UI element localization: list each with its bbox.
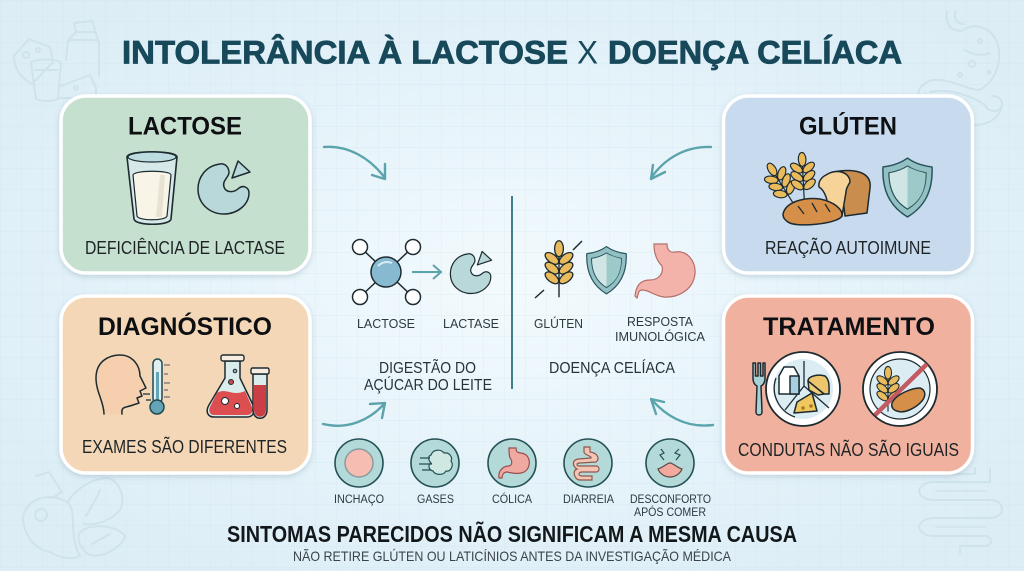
concept: celiac disease bbox=[534, 241, 705, 377]
symptoms row bbox=[334, 439, 711, 519]
arrow: diagnostico to centre bbox=[323, 403, 385, 426]
doodle: meat and leaves bbox=[23, 472, 125, 558]
heading: TRATAMENTO bbox=[763, 313, 935, 341]
title: X bbox=[577, 34, 598, 70]
label: IMUNOLÓGICA bbox=[615, 329, 705, 344]
doodle: dairy products bbox=[14, 21, 99, 101]
title: DOENÇA CELÍACA bbox=[608, 34, 902, 70]
icon: wheat ears and breads bbox=[757, 152, 870, 225]
title bbox=[122, 34, 902, 70]
label: LACTOSE bbox=[357, 316, 415, 331]
symptom: desconforto bbox=[630, 439, 711, 519]
caption: REAÇÃO AUTOIMUNE bbox=[765, 237, 931, 258]
icon: plate with dairy bbox=[766, 352, 840, 426]
panel: lactose bbox=[61, 96, 310, 273]
panel: gluten bbox=[724, 96, 972, 273]
footer headline: SINTOMAS PARECIDOS NÃO SIGNIFICAM A MESMA CAUSA bbox=[227, 520, 797, 547]
symptom: cólica: CÓLICA bbox=[492, 493, 532, 506]
icon: wheat bbox=[535, 241, 582, 298]
icon: crossed gluten plate bbox=[863, 352, 937, 426]
symptom: diarreia: DIARREIA bbox=[563, 494, 614, 506]
heading: DIAGNÓSTICO bbox=[98, 311, 272, 341]
arrow: molecule to enzyme bbox=[412, 265, 441, 279]
title: INTOLERÂNCIA À LACTOSE bbox=[122, 34, 568, 70]
heading: GLÚTEN bbox=[799, 110, 897, 140]
divider bbox=[511, 196, 513, 389]
caption: DOENÇA CELÍACA bbox=[549, 360, 676, 377]
arrow: tratamento to centre bbox=[651, 399, 713, 426]
card background bbox=[724, 96, 972, 273]
panel: tratamento bbox=[724, 296, 972, 473]
icon: fork bbox=[753, 363, 765, 415]
footer note: NÃO RETIRE GLÚTEN OU LATICÍNIOS ANTES DA INVESTIGAÇÃO MÉDICA bbox=[293, 548, 732, 564]
doodle: intestine bbox=[919, 468, 1002, 553]
heading: LACTOSE bbox=[128, 112, 242, 140]
icon: breath test with thermometer bbox=[96, 355, 170, 414]
arrow: gluten to centre bbox=[651, 147, 711, 179]
icon: lactase enzyme bbox=[198, 161, 250, 214]
icon: shield bbox=[883, 158, 932, 217]
label: RESPOSTA bbox=[627, 314, 693, 329]
symptom: desconforto: DESCONFORTO bbox=[630, 494, 711, 506]
label: GLÚTEN bbox=[534, 316, 583, 331]
doodle: stomach and intestine bbox=[918, 11, 1002, 125]
card background bbox=[61, 296, 310, 473]
label: LACTASE bbox=[443, 316, 499, 331]
symptom: inchaço: INCHAÇO bbox=[334, 494, 384, 506]
caption: AÇÚCAR DO LEITE bbox=[364, 377, 492, 394]
icon: stomach bbox=[635, 244, 695, 298]
icon: shield bbox=[587, 247, 626, 294]
icon: lactose molecule bbox=[352, 240, 420, 304]
symptom: cólica bbox=[488, 439, 536, 506]
symptom: gases bbox=[411, 439, 459, 506]
symptom: inchaço bbox=[334, 439, 384, 506]
panel: diagnostico bbox=[61, 296, 310, 473]
symptom: desconforto: APÓS COMER bbox=[634, 506, 706, 519]
caption: CONDUTAS NÃO SÃO IGUAIS bbox=[738, 439, 959, 460]
card background bbox=[724, 296, 972, 473]
concept: lactose digestion bbox=[352, 240, 499, 394]
icon: enzyme bbox=[450, 251, 492, 294]
caption: DIGESTÃO DO bbox=[379, 360, 476, 377]
caption: EXAMES SÃO DIFERENTES bbox=[82, 436, 287, 457]
icon: flask and test tube bbox=[207, 355, 269, 418]
card background bbox=[61, 96, 310, 273]
arrow: lactose to centre bbox=[324, 147, 385, 179]
symptom: diarreia bbox=[563, 439, 614, 506]
symptom: gases: GASES bbox=[417, 494, 454, 506]
caption: DEFICIÊNCIA DE LACTASE bbox=[85, 238, 285, 258]
icon: glass of milk bbox=[127, 152, 177, 224]
